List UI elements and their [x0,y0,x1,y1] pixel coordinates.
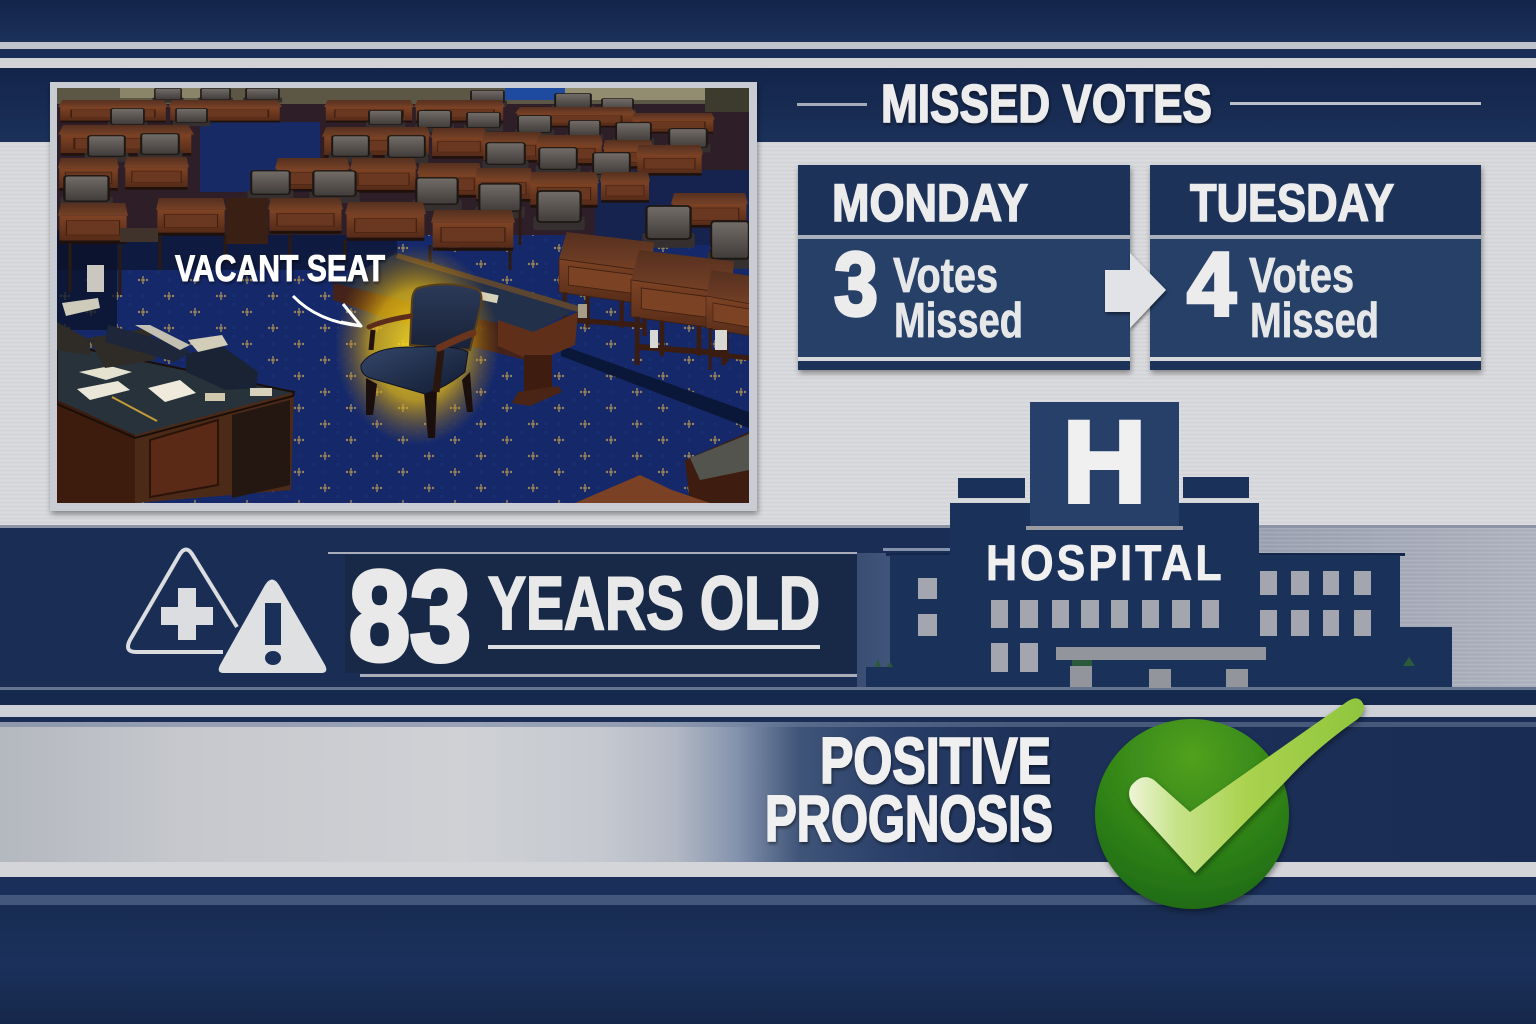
heading: missed votes: MISSED VOTES [881,74,1212,134]
arrow: monday to tuesday [1105,253,1166,328]
highlight glow [335,245,499,445]
text: positive prognosis: POSITIVE [820,724,1051,797]
text: positive prognosis [765,724,1053,855]
header band: missed votes [0,68,1536,142]
desk beside vacant seat [333,253,587,406]
underline [488,645,820,649]
icon: hospital building [866,398,1452,688]
hospital windows [918,571,1371,672]
icon: medical triangle [128,550,237,652]
text: missed: Missed [1250,294,1379,348]
bottom-right furniture [575,432,749,503]
text: votes: Votes [893,249,998,303]
sign letter H: H [1063,398,1146,526]
panel: monday card [798,165,1130,370]
panel: age [128,545,857,687]
panel: senate chamber photo [50,82,776,511]
icon: warning triangle [219,580,326,673]
icon: green check badge [1095,698,1364,909]
right desks with legs [558,232,749,370]
hospital entrance canopy [1056,647,1266,688]
number: 83: 83 [349,545,471,687]
text: votes: Votes [1249,249,1354,303]
vacant chair [361,284,482,438]
number: 3: 3 [834,235,878,335]
day label: monday: MONDAY [832,174,1028,233]
hospital label: HOSPITAL [986,535,1222,591]
back rows of desks and chairs [58,88,752,295]
day label: tuesday: TUESDAY [1190,174,1394,233]
text: missed: Missed [894,294,1023,348]
hospital sign [1030,398,1179,526]
label: vacant seat: VACANT SEAT [175,248,385,289]
arrow: to vacant seat [293,296,361,326]
panel: tuesday card [1150,165,1481,370]
raised platform edge [561,345,749,428]
text: positive prognosis: PROGNOSIS [765,782,1053,855]
text: years old: YEARS OLD [488,561,820,645]
number: 4: 4 [1187,235,1236,335]
bottom-left desk with books and papers [57,298,294,503]
